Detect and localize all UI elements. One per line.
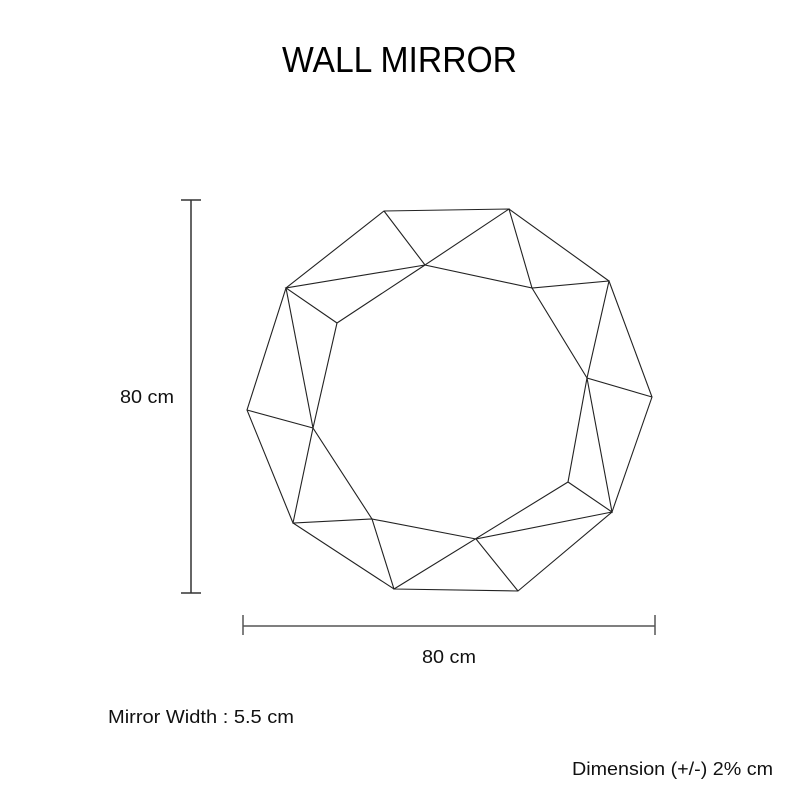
height label: 80 cm [120,387,174,407]
horizontal dimension line [243,615,655,635]
title: WALL MIRROR [282,39,517,80]
mirror drawing [247,209,652,591]
vertical dimension line [181,200,201,593]
tolerance note: Dimension (+/-) 2% cm [572,759,773,779]
width label: 80 cm [422,647,476,667]
mirror width note: Mirror Width : 5.5 cm [108,707,294,727]
